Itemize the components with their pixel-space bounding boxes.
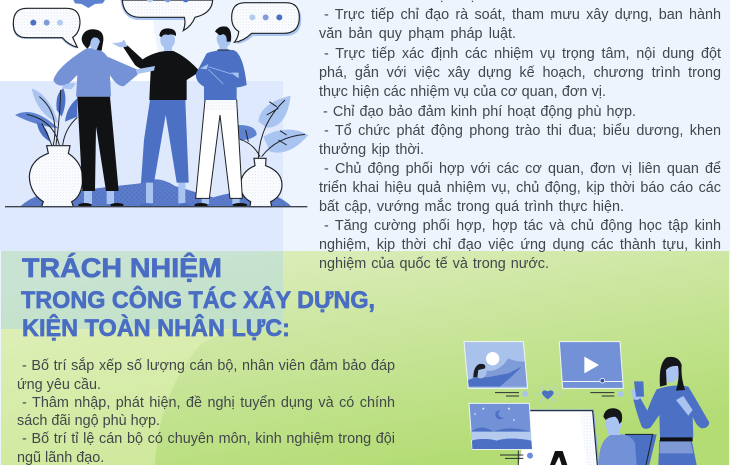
- person: seated man: [599, 408, 657, 465]
- title: responsibility heading: TRONG CÔNG TÁC XÂY DỰNG,: [21, 286, 375, 314]
- text block: leadership duties: - Trực tiếp xác định các nhiệm vụ trọng tâm, nội dung đột: [324, 46, 721, 62]
- plant: left: [15, 88, 77, 145]
- text block: staffing duties: ứng yêu cầu.: [17, 377, 101, 393]
- card: night landscape: [469, 403, 532, 449]
- caption lines and dots: [495, 391, 624, 465]
- text block: leadership duties: - Tăng cường phối hợp, hợp tác và chủ động học tập kinh: [324, 218, 721, 234]
- illustration: media and computer: [464, 342, 709, 465]
- plant: right: [238, 96, 308, 158]
- text block: leadership duties: nghiệm, kịp thời chỉ đạo việc ứng dụng các thành tựu, kinh: [319, 237, 721, 253]
- title: responsibility heading: TRÁCH NHIỆM: [22, 252, 222, 283]
- text block: leadership duties: thưởng kịp thời.: [319, 142, 424, 158]
- text block: leadership duties: - Chỉ đạo bảo đảm kinh phí hoạt động phù hợp.: [323, 104, 636, 120]
- icon: gear: [73, 0, 105, 8]
- text block: leadership duties: - Trực tiếp chỉ đạo rà soát, tham mưu xây dựng, ban hành: [324, 7, 721, 23]
- text block: leadership duties: - Chủ động phối hợp với các cơ quan, đơn vị liên quan để: [324, 161, 721, 177]
- text block: leadership duties: văn bản quy phạm pháp luật.: [319, 26, 516, 42]
- vase: right: [241, 158, 282, 207]
- text block: leadership duties: bất cập, vướng mắc trong quá trình thực hiện.: [319, 199, 624, 215]
- background: top panels: [0, 0, 730, 251]
- card: photo with person: [464, 342, 528, 388]
- text block: staffing duties: - Bố trí tỉ lệ cán bộ có chuyên môn, kinh nghiệm trong đội: [22, 431, 395, 447]
- text block: leadership duties: - Tổ chức phát động phong trào thi đua; biểu dương, khen: [324, 123, 721, 139]
- speech bubble: right: [232, 3, 301, 44]
- text block: staffing duties: [17, 357, 395, 465]
- text block: staffing duties: - Thâm nhập, phát hiện, đề nghị tuyển dụng và có chính: [22, 395, 395, 411]
- person: man with crossed arms: [194, 26, 247, 207]
- speech bubble: middle: [120, 0, 213, 31]
- title: responsibility heading: [21, 252, 375, 342]
- person: woman: [53, 29, 155, 207]
- text block: leadership duties: thực hiện các nhiệm vụ của cơ quan, đơn vị.: [319, 84, 606, 100]
- speech bubble: left: [13, 8, 80, 49]
- icon: heart with rays: [536, 382, 561, 407]
- text block: staffing duties: sách đãi ngộ phù hợp.: [17, 413, 160, 429]
- computer monitor: [518, 409, 599, 465]
- person: man in black: [112, 28, 200, 207]
- person: standing woman with phone: [631, 357, 709, 465]
- text block: leadership duties: nghiệm của quốc tế và trong nước.: [319, 256, 549, 272]
- illustration: three people talking: [5, 0, 308, 207]
- text block: leadership duties: triển khai hiệu quả nhiệm vụ, chủ động, kịp thời báo cáo các: [319, 180, 721, 196]
- text block: staffing duties: - Bố trí sắp xếp số lượng cán bộ, nhân viên đảm bảo đáp: [22, 358, 395, 374]
- text block: leadership duties: [319, 0, 721, 272]
- title: responsibility heading: KIỆN TOÀN NHÂN LỰC:: [22, 314, 290, 342]
- card: video player: [559, 342, 623, 388]
- background: green panel: [1, 251, 729, 465]
- ground hill: [20, 179, 292, 207]
- ground line: [5, 205, 307, 209]
- vase: left: [29, 146, 83, 207]
- text block: leadership duties: phá, gắn với việc xây dựng kế hoạch, chương trình trong: [319, 65, 721, 81]
